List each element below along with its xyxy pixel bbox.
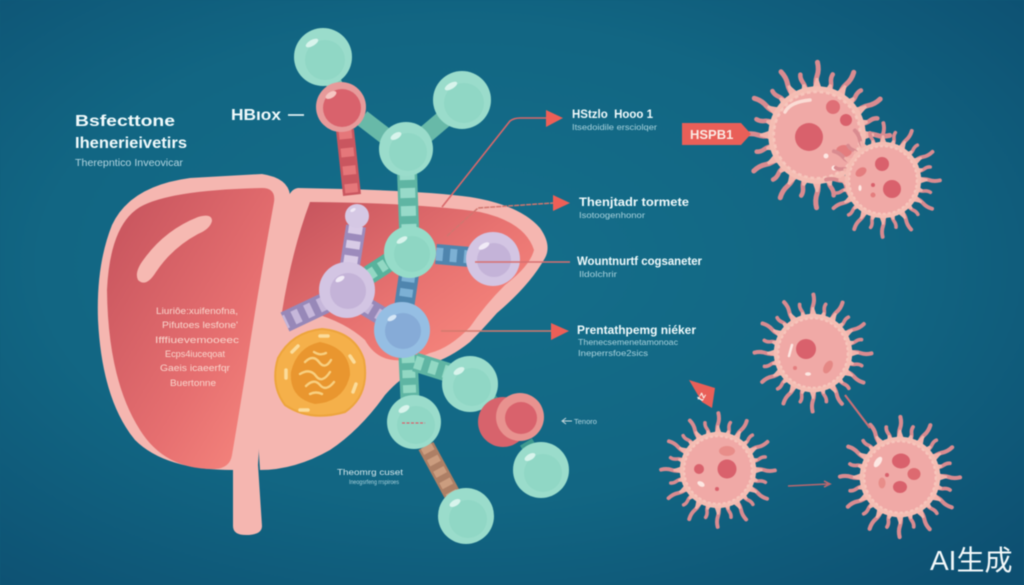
label: HBiox: HBıox (231, 107, 281, 124)
liver text block: Liuriôe:xuifenofna, (156, 306, 238, 316)
label: top right: Itsedoidile ersciolqer (572, 122, 657, 132)
ball: teal upper middle (379, 122, 433, 176)
liver text block: Buertonne (170, 378, 216, 388)
cell: lower right (840, 417, 960, 537)
subtitle: Therepntico Inveovicar (75, 158, 184, 169)
label: bottom: Ineogsrfeng rrspiroes (349, 480, 399, 486)
liver text block: Gaeis icaeerfqr (160, 363, 230, 373)
label: third: Wountnurtf cogsaneter (577, 256, 703, 268)
gallbladder (275, 329, 365, 416)
dashed marker (402, 422, 425, 424)
ball: red top (316, 82, 366, 132)
ball: lilac left (319, 262, 375, 318)
label: second: Thenjtadr tormete (579, 195, 689, 209)
arrow: to fourth label (441, 323, 569, 340)
panel: liver illustration (98, 174, 548, 535)
liver text block (155, 306, 240, 388)
ball: blue (374, 302, 430, 358)
label: top right: HStzlo Hooo 1 (572, 109, 654, 121)
ball: small lilac (345, 204, 369, 228)
label: second (579, 195, 689, 220)
cell: large top (744, 62, 890, 208)
arrow: cell to cell diagonal (845, 395, 870, 428)
chart: molecule structure (285, 28, 569, 544)
liver left lobe (98, 174, 290, 535)
liver text block: Pifutoes lesfone' (162, 320, 238, 330)
line: to third label (475, 261, 570, 263)
ball: teal bottom (438, 488, 494, 544)
cell: small top (826, 123, 940, 237)
HSPB1 tag: HSPB1 (690, 127, 733, 142)
arrow: to top label (442, 110, 563, 207)
watermark: AI生成 (930, 545, 1012, 576)
ball: red double (478, 393, 544, 447)
ball: teal top (294, 28, 352, 86)
label: HBiox (231, 107, 304, 124)
title (75, 113, 187, 152)
label: second: Isotoogenhonor (579, 210, 645, 220)
liver text block: Ifffiuevemooeec (155, 335, 240, 345)
arrow: cell to cell horizontal (788, 481, 830, 487)
label: fourth: Prentathpemg niéker (577, 325, 697, 337)
ball: teal upper right (433, 71, 491, 129)
label: third: Ildolchrir (579, 269, 617, 279)
title: Ihenerieivetirs (75, 135, 187, 152)
red flag marker (689, 380, 715, 408)
label: fourth: Ineperrsfoe2sics (578, 348, 648, 358)
label: small arrow: Tenoro (574, 417, 597, 426)
cell: middle (755, 295, 871, 411)
label: fourth: Thenecsemenetamonoac (578, 337, 679, 347)
arrow: to second label (447, 195, 570, 236)
cell: lower left (661, 413, 775, 527)
liver right lobe (258, 188, 548, 470)
ball: teal right bottom (513, 442, 569, 498)
label: third (577, 256, 703, 279)
liver text block: Ecps4iuceqoat (165, 349, 226, 359)
red flag marker: tz (695, 391, 709, 403)
label: small arrow (562, 417, 597, 426)
ball: lilac right (466, 232, 520, 286)
label: fourth (577, 325, 697, 358)
ball: teal lower right (442, 356, 498, 412)
title: Bsfecttone (75, 113, 175, 130)
label: bottom: Theomrg cuset (337, 467, 404, 477)
ball: teal lower (387, 395, 441, 449)
label: bottom (337, 467, 404, 486)
molecule bonds (285, 75, 532, 494)
ball: teal centre (384, 226, 436, 278)
label: top right (572, 109, 657, 132)
HSPB1 tag (682, 123, 751, 145)
